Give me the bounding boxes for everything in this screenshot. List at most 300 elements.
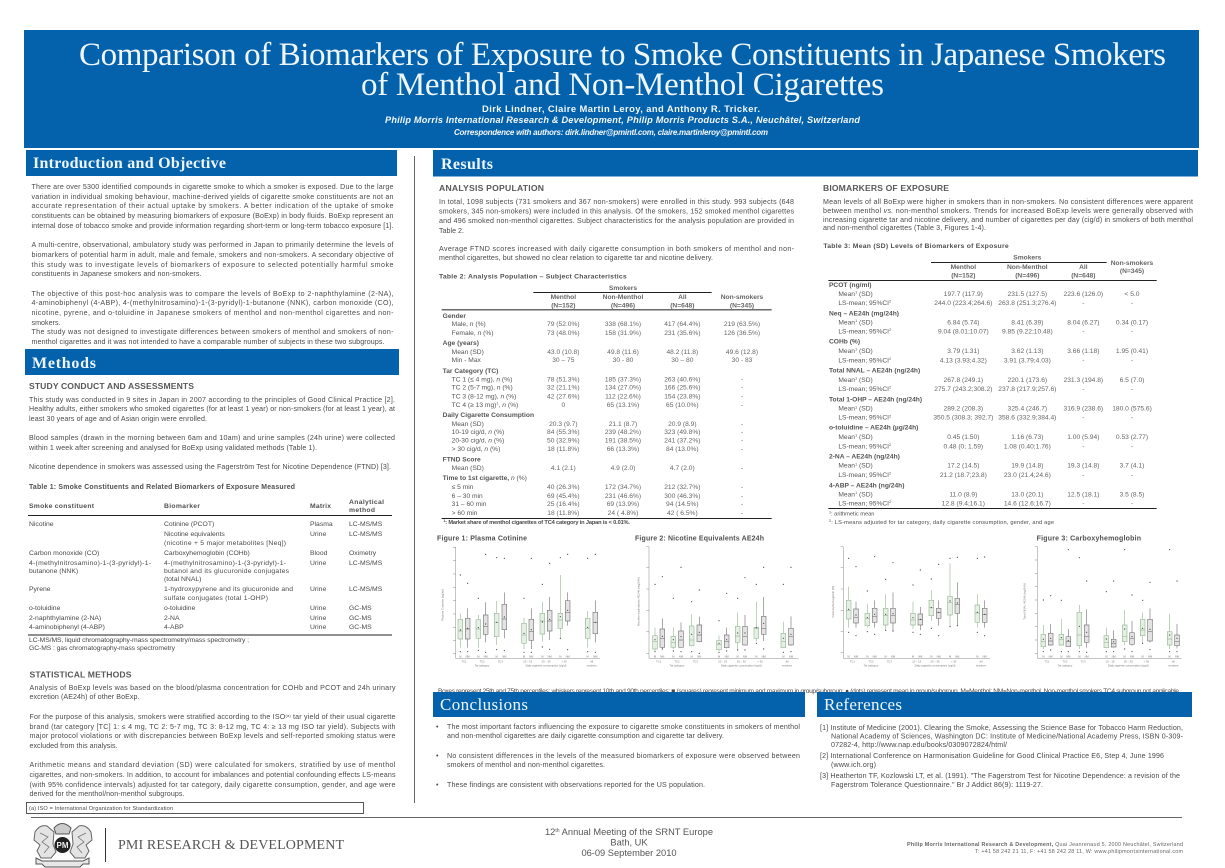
- table 1: smoke constituents: GC-MS: [349, 605, 372, 612]
- table 3: biomarker levels: -: [1082, 328, 1084, 335]
- figure 2: nicotine equivalents: NM: [679, 655, 683, 659]
- correspondence: Correspondence with authors: dirk.lindner@pmintl.com, claire.martinleroy@pmintl.com: [454, 128, 768, 137]
- conference details: th: [555, 828, 560, 834]
- table 1: smoke constituents: LC-MS/MS: [349, 531, 383, 538]
- figure 1: plasma cotinine: All: [590, 660, 594, 664]
- figure 2: nicotine equivalents: M: [672, 655, 674, 659]
- table 3: biomarker levels: 2: [889, 356, 892, 361]
- figure 3: carboxyhemoglobin / total NNAL chart: All: [1172, 660, 1175, 664]
- table 3: biomarker levels: 1: [829, 510, 831, 514]
- table 3: biomarker levels: Smokers: [1013, 255, 1042, 262]
- table 1: smoke constituents: 4-aminobiphenyl (4-ABP): [29, 624, 105, 631]
- reference list: National Academy of Sciences, Washington DC: Institute of Medicine/National Academy Press, ISBN 0-309-: [831, 732, 1184, 740]
- column divider: [414, 156, 415, 803]
- table 2: subject characteristics: 30 – 75: [552, 357, 575, 364]
- intro text: The objective of this post-hoc analysis was to compare the levels of BoExp to 2-naphthylamine (2-NA),: [32, 290, 394, 298]
- table 3: biomarker levels: Total NNAL – AE24h (ng/24h): [829, 368, 920, 375]
- panel: references: [817, 692, 1192, 789]
- table 2: subject characteristics: ≤ 5 min: [452, 484, 474, 491]
- study conduct section: Blood samples (drawn in the morning between 6am and 10am) and urine samples (24h urine) were collected: [29, 434, 395, 442]
- table 3: biomarker levels: 2: [829, 519, 831, 523]
- table 3: biomarker levels: Table 3: Mean (SD) Levels of Biomarkers of Exposure: [823, 243, 1009, 250]
- table 3: biomarker levels: [823, 243, 1157, 526]
- table 3: biomarker levels: 13.0 (20.1): [1011, 491, 1043, 498]
- table 2: subject characteristics: 18 (11.8%): [547, 446, 579, 453]
- table 2: subject characteristics: 338 (68.1%): [605, 321, 641, 328]
- table 3: biomarker levels: 197.7 (117.9): [944, 291, 983, 298]
- table 2: subject characteristics: 20-30 cig/d, n (%): [452, 438, 504, 445]
- table 3: biomarker levels: PCOT (ng/ml): [829, 282, 872, 289]
- table 3: biomarker levels: 2: [889, 442, 892, 447]
- table 2: subject characteristics: 417 (64.4%): [664, 321, 700, 328]
- figure: carboxyhemoglobin chart: All: [980, 660, 983, 664]
- figure: carboxyhemoglobin chart: TC2: [868, 660, 874, 664]
- study conduct section: [28, 381, 395, 471]
- table 2: subject characteristics: 185 (37.3%): [605, 376, 641, 383]
- table 1: smoke constituents: LC-MS/MS: [349, 560, 383, 567]
- table 3: biomarker levels: 237.8 (217.9;257.6): [998, 386, 1056, 393]
- table 3: biomarker levels: LS-mean; 95%CI: [838, 386, 889, 393]
- table 2: subject characteristics: 300 (46.3%): [664, 493, 700, 500]
- table 2: subject characteristics: -: [741, 421, 743, 428]
- analysis population section: and 496 smoked non-menthol cigarettes. Subject characteristics for the analysis population are provided in: [439, 217, 794, 225]
- table 3: biomarker levels: -: [1082, 300, 1084, 307]
- table 2: subject characteristics: 42 (27.6%): [547, 393, 580, 400]
- figure 1: plasma cotinine: NM: [529, 655, 533, 659]
- biomarkers of exposure section: [823, 183, 1193, 232]
- intro text: There are over 5300 identified compounds in cigarette smoke to which a smoker is exposed. Due to the large: [32, 183, 394, 191]
- table 3: biomarker levels: 1: [855, 433, 858, 438]
- table 3: biomarker levels: 231.5 (127.5): [1008, 291, 1047, 298]
- table 3: biomarker levels: -: [1082, 357, 1084, 364]
- table 2: subject characteristics: 241 (37.2%): [664, 438, 700, 445]
- reference list: [820, 724, 1184, 789]
- figure 1: plasma cotinine: M: [587, 655, 589, 659]
- table 3: biomarker levels: < 5.0: [1124, 291, 1140, 298]
- analysis population section: In total, 1098 subjects (731 smokers and 367 non-smokers) were enrolled in this study. 993 subjects (648: [439, 198, 794, 206]
- PMI wordmark: PMI RESEARCH & DEVELOPMENT: [118, 838, 344, 853]
- figure: carboxyhemoglobin chart: Carboxyhemoglobin [%]: [831, 586, 835, 618]
- table 2: subject characteristics: Non-Menthol: [603, 294, 643, 301]
- table 2: subject characteristics: Table 2: Analysis Population – Subject Characteristics: [439, 274, 627, 281]
- contact details: Philip Morris International Research & Development, Quai Jeanrenaud 5, 2000 Neuchâtel, Switzerland: [907, 842, 1183, 848]
- figure 3: carboxyhemoglobin / total NNAL chart: [1022, 536, 1182, 668]
- heading: references: References: [824, 695, 902, 714]
- table 1: smoke constituents: GC-MS: [349, 615, 372, 622]
- conference details: 12: [545, 827, 555, 837]
- analysis population section: Average FTND scores increased with daily cigarette consumption in both smokers of menthol and non-: [439, 245, 795, 253]
- figure: carboxyhemoglobin chart: M: [912, 655, 914, 659]
- table 3: biomarker levels: (SD): [857, 491, 873, 498]
- figure 2: nicotine equivalents: NM: [762, 655, 766, 659]
- table 2: subject characteristics: 239 (48.2%): [605, 429, 641, 436]
- table 3: biomarker levels: 9.04 (8.01;10.07): [938, 328, 989, 335]
- statistical methods section: For the purpose of this analysis, smokers were stratified according to the ISO: [30, 713, 285, 721]
- table 3: biomarker levels: (N=648): [1071, 273, 1095, 280]
- figure 3: carboxyhemoglobin / total NNAL chart: NM: [1066, 655, 1070, 659]
- figure 2: nicotine equivalents: Daily cigarette consumption (cig/d): [721, 664, 762, 668]
- study conduct section: within 1 week after screening and analysed for BoExp using validated methods (Table 1).: [28, 444, 317, 452]
- table 3: biomarker levels: Non-smokers: [1111, 260, 1154, 267]
- table 2: subject characteristics: 24 ( 4.8%): [608, 510, 638, 517]
- figure 3: carboxyhemoglobin / total NNAL chart: NM: [1112, 655, 1116, 659]
- table 3: biomarker levels: -: [1082, 386, 1084, 393]
- intro text: accurate representation of their actual uptake by smokers. A better indication of the uptake of smoke: [32, 202, 394, 210]
- table 1: smoke constituents: LC-MS/MS: [349, 521, 383, 528]
- figure legend note: Boxes represent 25th and 75th percentiles; whiskers represent 10th and 90th percentiles; ■ (squares) represent minimum and maximum in group/subgroup; ● (dots) represent mean in group/subgroup. M=Menthol; NM=Non-menthol. Non-menthol smokers TC4 subgroup not applicable: [438, 688, 1179, 695]
- table 2: subject characteristics: -: [741, 510, 743, 517]
- figure: carboxyhemoglobin chart: smokers: [976, 664, 987, 668]
- table 1: smoke constituents: 4-(methylnitrosamino)-1-(3-pyridyl)-1-: [164, 560, 286, 567]
- table 1: smoke constituents: Plasma: [310, 521, 333, 528]
- figure 3: carboxyhemoglobin / total NNAL chart: Tar category: [1058, 664, 1073, 668]
- table 2: subject characteristics: 32 (21.1%): [547, 385, 580, 392]
- figure 3: carboxyhemoglobin / total NNAL chart: M: [1042, 655, 1044, 659]
- table 3: biomarker levels: (SD): [857, 463, 873, 470]
- analysis population section: Table 2.: [439, 227, 464, 235]
- table 2: subject characteristics: : Market share of menthol cigarettes of TC4 category in Japan is < 0.01%.: [445, 520, 630, 526]
- table 2: subject characteristics: 30 – 80: [671, 357, 694, 364]
- figure 1: plasma cotinine: smokers: [587, 664, 597, 668]
- table 1: smoke constituents: method: [349, 507, 375, 514]
- intro text: [32, 183, 394, 346]
- table 3: biomarker levels: 220.1 (173.6): [1008, 377, 1047, 384]
- figure: carboxyhemoglobin chart: M: [866, 655, 868, 659]
- reference list: (www.ich.org): [831, 761, 876, 769]
- figure 3: carboxyhemoglobin / total NNAL chart: M: [1105, 655, 1107, 659]
- table 2: subject characteristics: 49.8 (11.6): [607, 349, 639, 356]
- figure 3: carboxyhemoglobin / total NNAL chart: M: [1169, 655, 1171, 659]
- figure: carboxyhemoglobin chart: NM: [937, 655, 941, 659]
- statistical methods section: Analysis of BoExp levels was based on the blood/plasma concentration for COHb and PCOT and 24h urinary: [30, 684, 396, 692]
- table 2: subject characteristics: (N=152): [551, 302, 575, 309]
- table 3: biomarker levels: -: [1131, 472, 1133, 479]
- figure: carboxyhemoglobin chart: TC3: [887, 660, 892, 664]
- table 3: biomarker levels: -: [1082, 472, 1084, 479]
- conclusion bullets: •: [436, 752, 439, 760]
- table 3: biomarker levels: 223.6 (126.0): [1064, 291, 1103, 298]
- intro text: menthol cigarettes and it was not intended to have a comparable number of subjects in these two subgroups.: [32, 338, 385, 346]
- table 2: subject characteristics: FTND Score: [443, 457, 481, 464]
- figure: carboxyhemoglobin chart: NM: [873, 655, 877, 659]
- table 2: subject characteristics: 6 – 30 min: [452, 493, 483, 500]
- statistical methods section: brand (tar category [TC] 1: ≤ 4 mg, TC 2: 5-7 mg, TC 3: 8-12 mg, TC 4: ≥ 13 mg ISO tar yield). Subjects with: [30, 723, 396, 731]
- table 1: smoke constituents: o-toluidine: [164, 605, 196, 612]
- table 2: subject characteristics: 73 (48.0%): [547, 330, 580, 337]
- table 2: subject characteristics: 21.1 (8.7): [609, 421, 637, 428]
- table 2: subject characteristics: 323 (49.8%): [664, 429, 700, 436]
- figure: carboxyhemoglobin chart: M: [930, 655, 932, 659]
- table 2: subject characteristics: -: [741, 493, 743, 500]
- table 3: biomarker levels: -: [1131, 415, 1133, 422]
- figure 1: plasma cotinine: NM: [566, 655, 570, 659]
- figure: carboxyhemoglobin chart: [831, 547, 990, 668]
- table 3: biomarker levels: 2: [889, 413, 892, 418]
- figure: carboxyhemoglobin chart: > 30: [951, 660, 957, 664]
- table 1: smoke constituents: GC-MS : gas chromatography-mass spectrometry: [29, 645, 176, 652]
- figure: carboxyhemoglobin chart: 10 – 19: [912, 660, 922, 664]
- table 3: biomarker levels: (SD): [857, 291, 873, 298]
- table 2: subject characteristics: 158 (31.9%): [605, 330, 641, 337]
- figure: carboxyhemoglobin chart: NM: [891, 655, 895, 659]
- table 2: subject characteristics: Daily Cigarette Consumption: [443, 412, 534, 419]
- table 3: biomarker levels: -: [1082, 415, 1084, 422]
- table 3: biomarker levels: 3.91 (3.79;4.03): [1004, 357, 1051, 364]
- table 3: biomarker levels: Menthol: [951, 264, 976, 271]
- figure: carboxyhemoglobin chart: NM: [983, 655, 987, 659]
- table 1: smoke constituents: 2-NA: [164, 615, 180, 622]
- table 2: subject characteristics: 65 (13.1%): [607, 402, 639, 409]
- panel: results: [433, 150, 1198, 695]
- table 3: biomarker levels: 231.3 (194.8): [1064, 377, 1103, 384]
- table 1: smoke constituents: Analytical: [349, 499, 384, 506]
- table 1: smoke constituents: (nicotine + 5 major metabolites [Neq]): [164, 540, 286, 547]
- table 2: subject characteristics: 50 (32.9%): [547, 438, 580, 445]
- figure 1: plasma cotinine: M: [477, 655, 479, 659]
- figure 2: nicotine equivalents: M: [654, 655, 656, 659]
- figure 1: plasma cotinine: NM: [593, 655, 597, 659]
- figure: carboxyhemoglobin chart: NM: [918, 655, 922, 659]
- table 1: smoke constituents: Biomarker: [164, 503, 200, 510]
- table 3: biomarker levels: : arithmetic mean: [831, 511, 874, 517]
- table 2: subject characteristics: 126 (36.5%): [724, 330, 760, 337]
- table 2: subject characteristics: 40 (26.3%): [547, 484, 580, 491]
- table 2: subject characteristics: 4.7 (2.0): [670, 465, 695, 472]
- figure 2: nicotine equivalents: M: [718, 655, 720, 659]
- table 2: subject characteristics: ,: [499, 402, 502, 409]
- table 2: subject characteristics: 69 (13.9%): [607, 501, 639, 508]
- table 3: biomarker levels: 1.95 (0.41): [1116, 348, 1148, 355]
- table 3: biomarker levels: 4.13 (3.93;4.32): [940, 357, 987, 364]
- table 1: smoke constituents: Urine: [310, 531, 326, 538]
- intro text: The study was not designed to investigate differences between smokers of menthol and smokers of non-: [32, 328, 394, 336]
- statistical methods section: Arithmetic means and standard deviation (SD) were calculated for smokers, stratified by use of menthol: [30, 761, 396, 769]
- intro text: internal dose of tobacco smoke and provide information regarding short-term or long-term tobacco exposure [1].: [32, 222, 394, 230]
- analysis population section: ANALYSIS POPULATION: [439, 183, 544, 193]
- table 2: subject characteristics: 1: [443, 519, 445, 523]
- table 2: subject characteristics: 231 (46.6%): [605, 493, 641, 500]
- figure 3: carboxyhemoglobin / total NNAL chart: NM: [1148, 655, 1152, 659]
- table 3: biomarker levels: (SD): [857, 319, 873, 326]
- reference list: [3] Heatherton TF, Kozlowski LT, et al. (1991). "The Fagerstrom Test for Nicotine Dependence: a revision of the: [820, 772, 1180, 780]
- table 1: smoke constituents: Nicotine equivalents: [164, 531, 225, 538]
- table 2: subject characteristics: Smokers: [609, 285, 637, 292]
- figure 3: carboxyhemoglobin / total NNAL chart: TC3: [1080, 660, 1086, 664]
- table 3: biomarker levels: 11.0 (8.9): [949, 491, 977, 498]
- table 3: biomarker levels: Mean: [838, 291, 855, 298]
- conclusion bullets: The most important factors influencing the exposure to cigarette smoke constituents in smokers of menthol: [447, 723, 800, 731]
- heading: methods: Methods: [32, 355, 96, 372]
- figure 3: carboxyhemoglobin / total NNAL chart: TC2: [1062, 660, 1068, 664]
- table 3: biomarker levels: -: [1082, 500, 1084, 507]
- table 3: biomarker levels: 6.5 (7.0): [1120, 377, 1144, 384]
- table 2: subject characteristics: TC 4 (≥ 13 mg): [452, 402, 496, 409]
- table 3: biomarker levels: 17.2 (14.5): [947, 463, 979, 470]
- table 3: biomarker levels: 23.0 (21.4;24.6): [1004, 472, 1051, 479]
- table 2: subject characteristics: 48.2 (11.8): [666, 349, 698, 356]
- table 3: biomarker levels: LS-mean; 95%CI: [838, 472, 889, 479]
- figure 3: carboxyhemoglobin / total NNAL chart: Daily cigarette consumption (cig/d): [1108, 664, 1149, 668]
- conclusion bullets: No consistent differences in the levels of the measured biomarkers of exposure were observed between: [447, 752, 800, 760]
- table 2: subject characteristics: > 30 cig/d, n (%): [452, 446, 500, 453]
- figure 2: nicotine equivalents: M: [782, 655, 784, 659]
- figure 1: plasma cotinine: M: [541, 655, 543, 659]
- table 3: biomarker levels: 289.2 (208.3): [944, 406, 983, 413]
- intro text: A multi-centre, observational, ambulatory study was performed in Japan to primarily determine the levels of: [32, 241, 394, 249]
- table 3: biomarker levels: COHb (%): [829, 339, 860, 346]
- table 3: biomarker levels: (N=496): [1015, 273, 1039, 280]
- table 3: biomarker levels: -: [1131, 300, 1133, 307]
- statistical methods section: STATISTICAL METHODS: [30, 670, 132, 680]
- heading: results: Results: [441, 156, 493, 173]
- table 2: subject characteristics: -: [741, 446, 743, 453]
- conclusion bullets: These findings are consistent with observations reported for the US population.: [447, 781, 705, 789]
- table 2: subject characteristics: Min - Max: [452, 357, 482, 364]
- table 2: subject characteristics: 84 (13.0%): [666, 446, 699, 453]
- biomarkers of exposure section: between menthol vs. non-menthol smokers. Trends for increased BoExp levels were generally observed with: [823, 207, 1193, 215]
- statistical methods section: derived for the menthol/non-menthol subgroups.: [30, 790, 185, 798]
- figure 1: plasma cotinine: TC2: [479, 660, 485, 664]
- table 2: subject characteristics: 10-19 cig/d, n (%): [452, 429, 504, 436]
- table 3: biomarker levels: -: [1131, 328, 1133, 335]
- study conduct section: STUDY CONDUCT AND ASSESSMENTS: [29, 381, 194, 391]
- table 2: subject characteristics: -: [741, 465, 743, 472]
- table 2: subject characteristics: 30 - 80: [613, 357, 634, 364]
- table 3: biomarker levels: (SD): [857, 348, 873, 355]
- table 2: subject characteristics: 263 (40.6%): [664, 376, 700, 383]
- figure 2: nicotine equivalents: NM: [789, 655, 793, 659]
- panel: methods: [25, 349, 399, 814]
- figure 3: carboxyhemoglobin / total NNAL chart: NM: [1130, 655, 1134, 659]
- heading: introduction: Introduction and Objective: [33, 155, 226, 172]
- table 3: biomarker levels: -: [1082, 443, 1084, 450]
- table 2: subject characteristics: 212 (32.7%): [664, 484, 700, 491]
- table 2: subject characteristics: Gender: [443, 313, 466, 320]
- statistical methods section: excluded from this analysis.: [30, 742, 118, 750]
- header banner: [24, 30, 1199, 148]
- table 2: subject characteristics: 31 – 60 min: [452, 501, 487, 508]
- biomarkers of exposure section: BIOMARKERS OF EXPOSURE: [823, 183, 949, 193]
- statistical methods section: major protocol violations or with discrepancies between BoExp levels and self-reported smoking status were: [30, 732, 396, 740]
- figure 1: plasma cotinine: TC1: [461, 660, 467, 664]
- table 2: subject characteristics: -: [741, 438, 743, 445]
- intro text: biomarkers of potential harm in adult, male and female, smokers and non-smokers. A secondary objective of: [32, 251, 394, 259]
- figure 2: nicotine equivalents: M: [691, 655, 693, 659]
- table 3: biomarker levels: 0.34 (0.17): [1116, 319, 1148, 326]
- table 1: smoke constituents: Urine: [310, 615, 326, 622]
- table 1: smoke constituents: Urine: [310, 560, 326, 567]
- table 2: subject characteristics: 154 (23.8%): [664, 393, 700, 400]
- table 2: subject characteristics: (N=648): [670, 302, 694, 309]
- table 3: biomarker levels: 14.6 (12.6;16.7): [1004, 500, 1051, 507]
- table 3: biomarker levels: 244.0 (223.4;264.6): [934, 300, 992, 307]
- table 2: subject characteristics: 112 (22.6%): [605, 393, 641, 400]
- table 3: biomarker levels: Mean: [838, 377, 855, 384]
- affiliation: Philip Morris International Research & Development, Philip Morris Products S.A., Neuchâtel, Switzerland: [385, 115, 860, 125]
- table 3: biomarker levels: (SD): [857, 406, 873, 413]
- table 2: subject characteristics: Male, n (%): [452, 321, 486, 328]
- biomarkers of exposure section: Mean levels of all BoExp were higher in smokers than in non-smokers. No consistent differences were apparent: [823, 198, 1193, 206]
- figure 2: nicotine equivalents: NM: [660, 655, 664, 659]
- table 2: subject characteristics: 134 (27.0%): [605, 385, 641, 392]
- table 3: biomarker levels: Non-Menthol: [1007, 264, 1048, 271]
- table 2: subject characteristics: -: [741, 501, 743, 508]
- table 2: subject characteristics: n (%): [502, 402, 518, 409]
- PMI crest logo: PM: [56, 841, 69, 850]
- intro text: constituents can be obtained by measuring biomarkers of exposure (BoExp) in body fluids. BoExp represent an: [32, 212, 394, 220]
- figure: carboxyhemoglobin chart: 20 – 30: [931, 660, 940, 664]
- table 2: subject characteristics: 79 (52.0%): [547, 321, 580, 328]
- table 3: biomarker levels: Mean: [838, 434, 855, 441]
- figure 2: nicotine equivalents: TC2: [674, 660, 680, 664]
- figure 3: carboxyhemoglobin / total NNAL chart: > 30: [1144, 660, 1149, 664]
- reference list: 07282-4, http://www.nap.edu/books/0309072824/html/: [831, 741, 1007, 749]
- conclusion bullets: [436, 723, 800, 789]
- figure 3: carboxyhemoglobin / total NNAL chart: TC1: [1044, 660, 1050, 664]
- table 3: biomarker levels: o-toluidine – AE24h (µg/24h): [829, 425, 918, 432]
- table 3: biomarker levels: Mean: [838, 491, 855, 498]
- table 3: biomarker levels: 263.8 (251.3;276.4): [998, 300, 1056, 307]
- table 3: biomarker levels: 2: [889, 471, 892, 476]
- table 2: subject characteristics: -: [741, 484, 743, 491]
- figure 3: carboxyhemoglobin / total NNAL chart: M: [1078, 655, 1080, 659]
- table 2: subject characteristics: 18 (11.8%): [547, 510, 579, 517]
- figure 1: plasma cotinine: > 30: [561, 660, 567, 664]
- table 3: biomarker levels: 19.3 (14.8): [1067, 463, 1099, 470]
- table 3: biomarker levels: 1: [855, 318, 858, 323]
- table 3: biomarker levels: 325.4 (246.7): [1008, 406, 1047, 413]
- figure 3: carboxyhemoglobin / total NNAL chart: M: [1060, 655, 1062, 659]
- conclusion bullets: •: [436, 723, 439, 731]
- figure 2: nicotine equivalents: NM: [697, 655, 701, 659]
- figure 3: carboxyhemoglobin / total NNAL chart: NM: [1085, 655, 1089, 659]
- table 1: smoke constituents: Table 1: Smoke Constituents and Related Biomarkers of Exposure Measured: [29, 484, 295, 491]
- table 2: subject characteristics: > 60 min: [452, 510, 478, 517]
- figure: carboxyhemoglobin chart: M: [848, 655, 850, 659]
- table 2: subject characteristics: 69 (45.4%): [547, 493, 580, 500]
- figure 1: plasma cotinine: M: [496, 655, 498, 659]
- conference details: 06-09 September 2010: [581, 848, 677, 858]
- table 2: subject characteristics: 84 (55.3%): [547, 429, 580, 436]
- figure 3: carboxyhemoglobin / total NNAL chart: M: [1124, 655, 1126, 659]
- figure 3: carboxyhemoglobin / total NNAL chart: NM: [1049, 655, 1053, 659]
- table 1: smoke constituents: Cotinine (PCOT): [164, 521, 214, 528]
- table 3: biomarker levels: -: [1131, 386, 1133, 393]
- figure 3: carboxyhemoglobin / total NNAL chart: Figure 3: Carboxyhemoglobin: [1037, 536, 1141, 543]
- figure: carboxyhemoglobin chart: M: [976, 655, 978, 659]
- title: Comparison of Biomarkers of Exposure to Smoke Constituents in Japanese Smokers: [79, 37, 1166, 73]
- table 2: subject characteristics: -: [741, 393, 743, 400]
- table 2: subject characteristics: 172 (34.7%): [605, 484, 641, 491]
- table 3: biomarker levels: 1: [855, 404, 858, 409]
- table 1: smoke constituents: 1-hydroxypyrene and its glucuronide and: [164, 586, 293, 593]
- table 1: smoke constituents: GC-MS: [349, 624, 372, 631]
- title: of Menthol and Non-Menthol Cigarettes: [361, 67, 884, 103]
- table 3: biomarker levels: Total 1-OHP – AE24h (ng/24h): [829, 397, 922, 404]
- statistical methods section: [30, 670, 396, 798]
- table 1: smoke constituents: Carboxyhemoglobin (COHb): [164, 550, 250, 557]
- figure 2: nicotine equivalents: All: [786, 660, 789, 664]
- statistical methods section: cigarettes, and non-smokers. In addition, to account for imbalances and potential confounding effects LS-means: [30, 771, 396, 779]
- table 2: subject characteristics: 191 (38.5%): [605, 438, 641, 445]
- table 2: subject characteristics: Age (years): [443, 340, 479, 347]
- table 3: biomarker levels: 12.8 (9.4;16.1): [942, 500, 985, 507]
- figure: carboxyhemoglobin chart: NM: [854, 655, 858, 659]
- intro text: 4-aminobiphenyl (4-ABP), 4-(methylnitrosamino)-1-(3-pyridyl)-1-butanone (NNK), carbon monoxide (CO),: [32, 299, 394, 307]
- table 3: biomarker levels: 3.7 (4.1): [1120, 463, 1144, 470]
- table 3: biomarker levels: 1.16 (6.73): [1011, 434, 1043, 441]
- figure 2: nicotine equivalents: [635, 536, 798, 668]
